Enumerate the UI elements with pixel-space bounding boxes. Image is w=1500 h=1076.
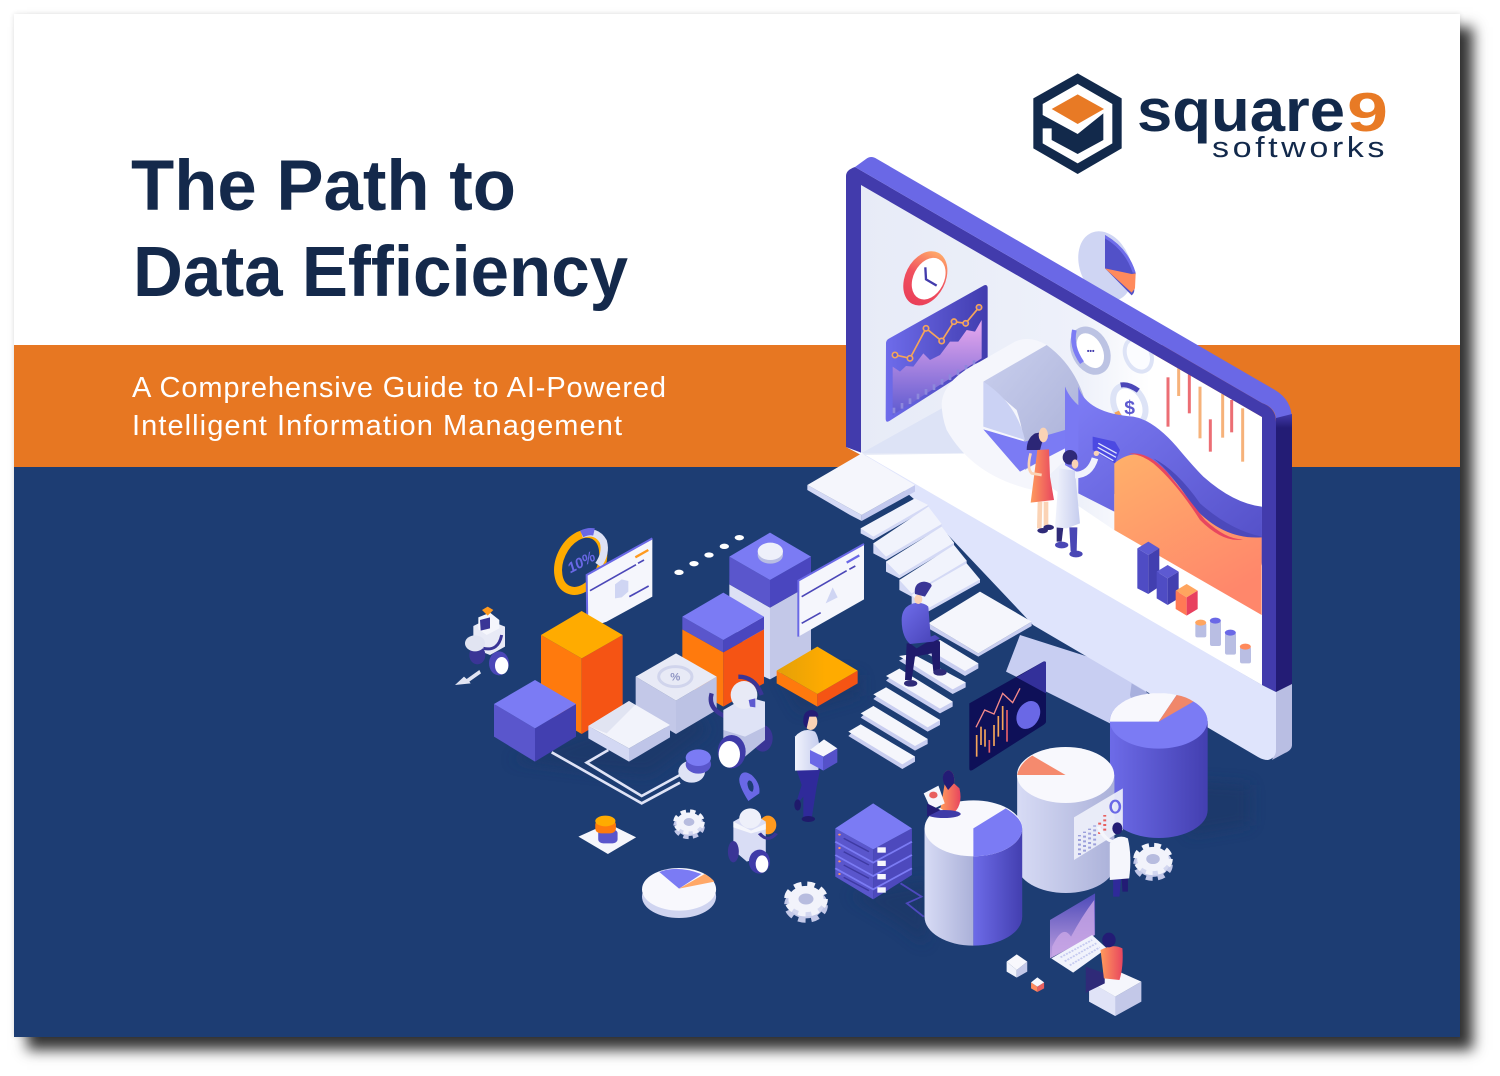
line chart panel (886, 285, 988, 422)
right purple cylinder with pie top (1110, 693, 1208, 838)
floor front band (862, 453, 1276, 760)
data card with triangle (798, 544, 864, 637)
cylinder scroll (942, 339, 1088, 490)
logo wordmark: 9 (1347, 81, 1388, 143)
logo: square9 softworks (1033, 73, 1388, 174)
tall purple and white block (729, 533, 811, 679)
icon: dollar ring (1107, 380, 1152, 430)
orange subtitle band (14, 345, 1460, 467)
percent cube (636, 653, 717, 734)
wave upper purple (1078, 387, 1262, 539)
button on tile (578, 816, 636, 854)
wave front layers (1027, 387, 1262, 663)
percent cube: % (670, 672, 680, 684)
bezel dark side (1276, 414, 1292, 692)
wave darker ribbon (1153, 458, 1262, 539)
upper landing (807, 453, 915, 521)
flat orange block (777, 647, 858, 707)
donut chart 10% (549, 526, 612, 598)
subtitle: A Comprehensive Guide to AI-Powered (132, 372, 666, 404)
purple cube (494, 680, 576, 762)
monitor stand underside (1006, 635, 1148, 723)
red edge (1128, 453, 1243, 540)
icon: clock (894, 244, 956, 313)
small robot (728, 808, 776, 874)
floor top (846, 447, 1262, 685)
small orange cube (1031, 977, 1044, 992)
robot with curved arms (711, 677, 773, 768)
logo wordmark: softworks (1212, 132, 1388, 164)
person climbing stairs (902, 582, 947, 687)
logo icon: hexagon cube (1033, 73, 1122, 174)
monitor floor (846, 447, 1276, 760)
icon: dollar ring: $ (1124, 398, 1135, 419)
bezel dark front (846, 167, 1276, 692)
icon: ring with dots (1066, 324, 1114, 377)
icon: gear 2 (787, 886, 825, 918)
subtitle: Intelligent Information Management (132, 410, 622, 442)
screen lower-left wedge (861, 407, 1017, 453)
floor shadows (510, 675, 1250, 945)
logo wordmark: square (1137, 77, 1345, 144)
left blocks cluster (455, 526, 864, 822)
small document on wave (1093, 437, 1120, 463)
staircase (807, 453, 1032, 769)
dotted progress line (674, 535, 744, 575)
tall orange block (541, 611, 623, 734)
monitor screen (861, 185, 1262, 685)
white header band (14, 14, 1460, 345)
robot with shield arm (465, 607, 509, 675)
man carrying box (794, 710, 837, 822)
purple and orange floor bars (1137, 542, 1198, 616)
upper steps (861, 498, 980, 613)
lower landing (928, 592, 1032, 657)
screen items (861, 244, 1243, 462)
woman with laptop on cylinder (924, 770, 961, 818)
subtitle (132, 372, 666, 442)
small floor cylinders (1195, 618, 1251, 663)
man in lab coat (1055, 450, 1099, 557)
wave back panel (1065, 387, 1262, 572)
wave purple lower (1065, 387, 1177, 473)
icon: gear 3 (1136, 847, 1170, 877)
logo wordmark (1137, 77, 1388, 164)
title: Data Efficiency (133, 233, 628, 312)
wave area chart and figures (942, 339, 1262, 572)
monitor base side (1272, 684, 1292, 760)
orange area (1114, 454, 1262, 615)
donut chart 10%: 10% (565, 549, 598, 577)
dark floating chart panel (969, 661, 1046, 771)
icon: location pin (739, 772, 760, 801)
data card with hexagon (587, 538, 652, 628)
monitor bezel (846, 157, 1292, 760)
icon: gear 1 (676, 813, 702, 836)
server rack (835, 803, 924, 917)
bottom objects (578, 747, 1141, 1016)
orange and purple block (682, 593, 764, 707)
laptop user on cube (1050, 893, 1141, 1016)
middle cylinder with pie top (1017, 747, 1114, 893)
connector node (678, 749, 711, 783)
lower steps (848, 640, 978, 769)
icon: pale ring (1120, 334, 1157, 376)
low white block (588, 701, 670, 762)
left cylinder half purple (925, 800, 1022, 946)
bezel light top (855, 157, 1292, 420)
pie disc (642, 868, 716, 918)
arrow (455, 670, 481, 685)
man at calendar (1074, 788, 1130, 897)
title: The Path to (131, 147, 516, 226)
icon: ring with dots: ••• (1087, 346, 1095, 355)
floating pie behind monitor (1068, 223, 1142, 309)
candlestick bars (1168, 368, 1243, 462)
title (131, 147, 628, 312)
woman in red dress (1027, 428, 1054, 533)
small white cube (1007, 954, 1027, 978)
connector wires (552, 750, 680, 803)
